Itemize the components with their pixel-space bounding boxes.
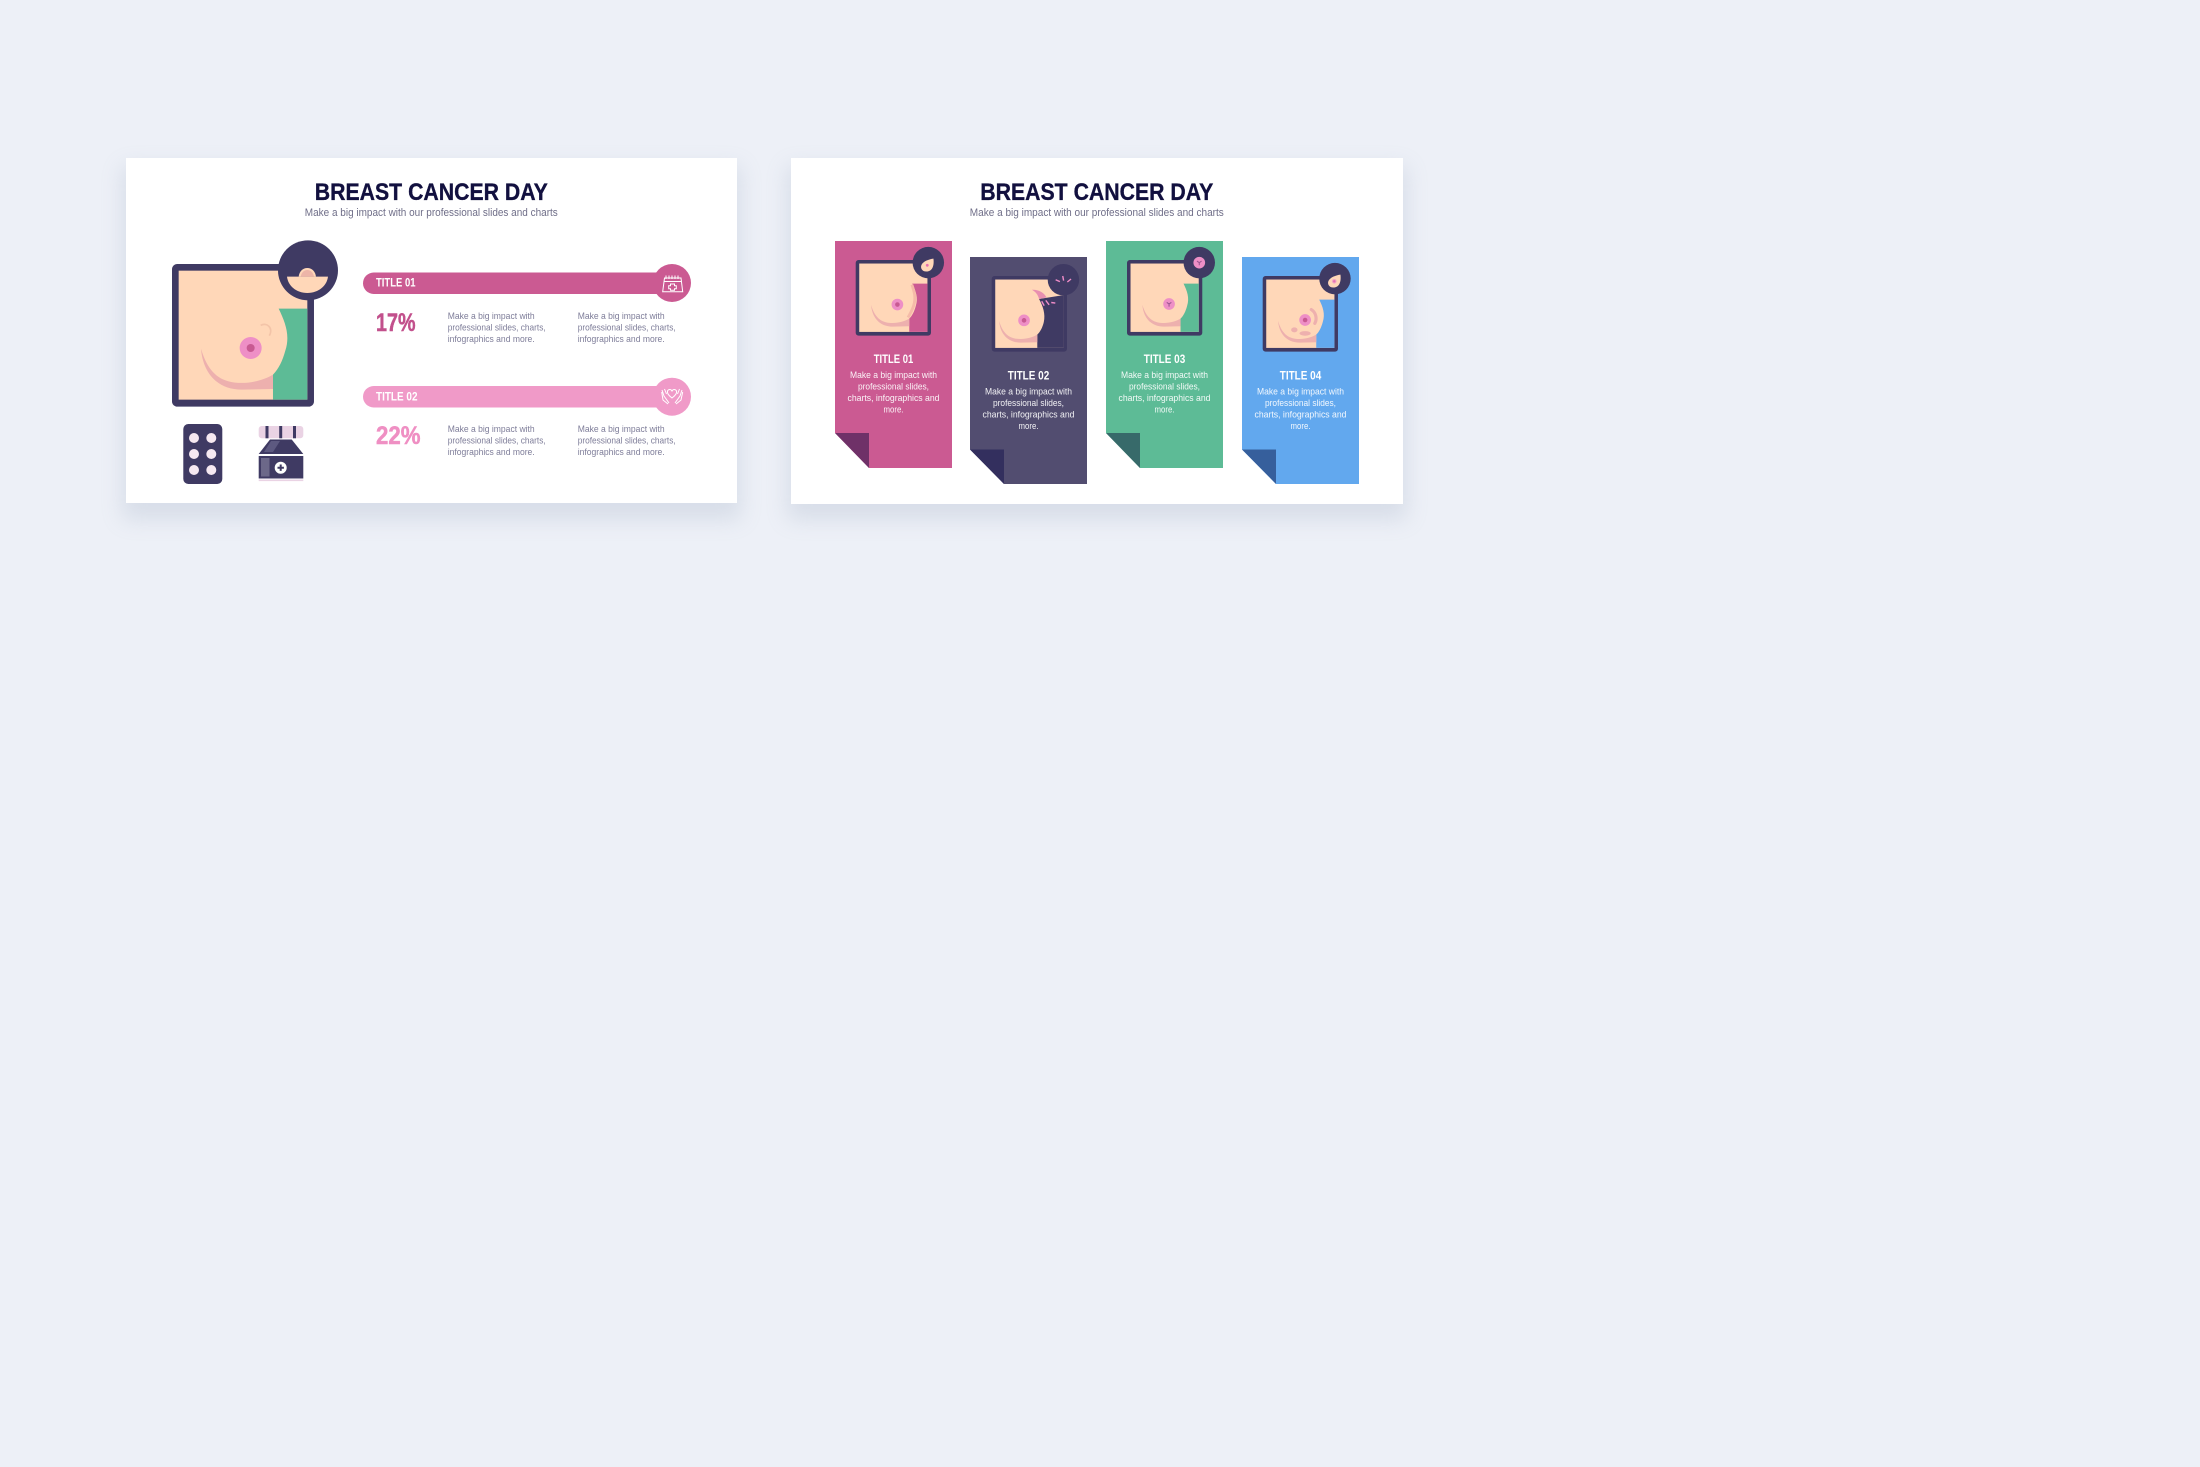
card 03: TITLE 03 — [1144, 354, 1185, 366]
statistic 17%: 17% — [376, 309, 416, 337]
illustration: breast with swelling — [856, 247, 944, 336]
title bar 01 — [363, 264, 691, 302]
title bar 01: TITLE 01 — [376, 278, 416, 290]
text block: row 1 column 1 — [448, 311, 546, 344]
card text — [1254, 386, 1346, 431]
statistic 22%: 22% — [376, 422, 420, 450]
panel: statistics slide — [126, 158, 737, 503]
card text: charts, infographics and — [982, 410, 1074, 420]
title bar 02 — [363, 378, 691, 416]
card text: professional slides, — [858, 382, 929, 392]
card text: Make a big impact with — [1257, 386, 1344, 396]
text block: row 2 column 2: Make a big impact with — [578, 424, 665, 434]
card 01 — [835, 241, 952, 468]
text block: row 1 column 2: infographics and more. — [578, 334, 665, 344]
subtitle: Make a big impact with our professional slides and charts — [970, 207, 1224, 219]
text block: row 2 column 2: professional slides, charts, — [578, 436, 676, 446]
card text: more. — [1154, 404, 1174, 414]
card 04: TITLE 04 — [1280, 370, 1322, 382]
text block: row 1 column 2 — [578, 311, 676, 344]
card text — [982, 386, 1074, 431]
illustration: breast with lumps — [1263, 263, 1351, 352]
card text — [1118, 370, 1210, 414]
card 04 — [1242, 257, 1359, 484]
illustration: breast in frame — [172, 240, 338, 407]
icon: hands holding heart — [662, 389, 683, 404]
text block: row 2 column 1: infographics and more. — [448, 447, 535, 457]
illustration: breast with nipple change — [1127, 247, 1215, 336]
card text: professional slides, — [1129, 382, 1200, 392]
card text: charts, infographics and — [1254, 410, 1346, 420]
heading: BREAST CANCER DAY — [315, 179, 548, 206]
panel: symptoms cards slide — [791, 158, 1403, 504]
card 03 — [1106, 241, 1223, 468]
heading: BREAST CANCER DAY — [980, 179, 1213, 206]
card text: Make a big impact with — [1121, 370, 1208, 380]
icon: calendar with cross — [663, 276, 683, 292]
subtitle: Make a big impact with our professional slides and charts — [305, 207, 558, 219]
card 01: TITLE 01 — [874, 354, 914, 366]
text block: row 1 column 1: professional slides, charts, — [448, 322, 546, 332]
card text: more. — [1290, 421, 1310, 431]
card text — [848, 370, 940, 414]
card text: charts, infographics and — [1118, 393, 1210, 403]
card text: professional slides, — [1265, 398, 1336, 408]
card text: more. — [884, 404, 904, 414]
text block: row 2 column 1: professional slides, charts, — [448, 436, 546, 446]
title bar 02: TITLE 02 — [376, 391, 418, 403]
card text: professional slides, — [993, 398, 1064, 408]
text block: row 1 column 2: Make a big impact with — [578, 311, 665, 321]
card text: charts, infographics and — [848, 393, 940, 403]
text block: row 1 column 2: professional slides, charts, — [578, 322, 676, 332]
illustration: breast with pain — [992, 264, 1079, 352]
icon: pill blister pack — [183, 424, 222, 484]
card text: Make a big impact with — [850, 370, 937, 380]
text block: row 2 column 2 — [578, 424, 676, 457]
text block: row 1 column 1: infographics and more. — [448, 334, 535, 344]
text block: row 2 column 1: Make a big impact with — [448, 424, 535, 434]
text block: row 2 column 2: infographics and more. — [578, 447, 665, 457]
card text: Make a big impact with — [985, 386, 1072, 396]
text block: row 1 column 1: Make a big impact with — [448, 311, 535, 321]
text block: row 2 column 1 — [448, 424, 546, 457]
card 02: TITLE 02 — [1008, 370, 1049, 382]
card text: more. — [1018, 421, 1038, 431]
card 02 — [970, 257, 1087, 484]
icon: medicine bottle — [259, 426, 303, 481]
